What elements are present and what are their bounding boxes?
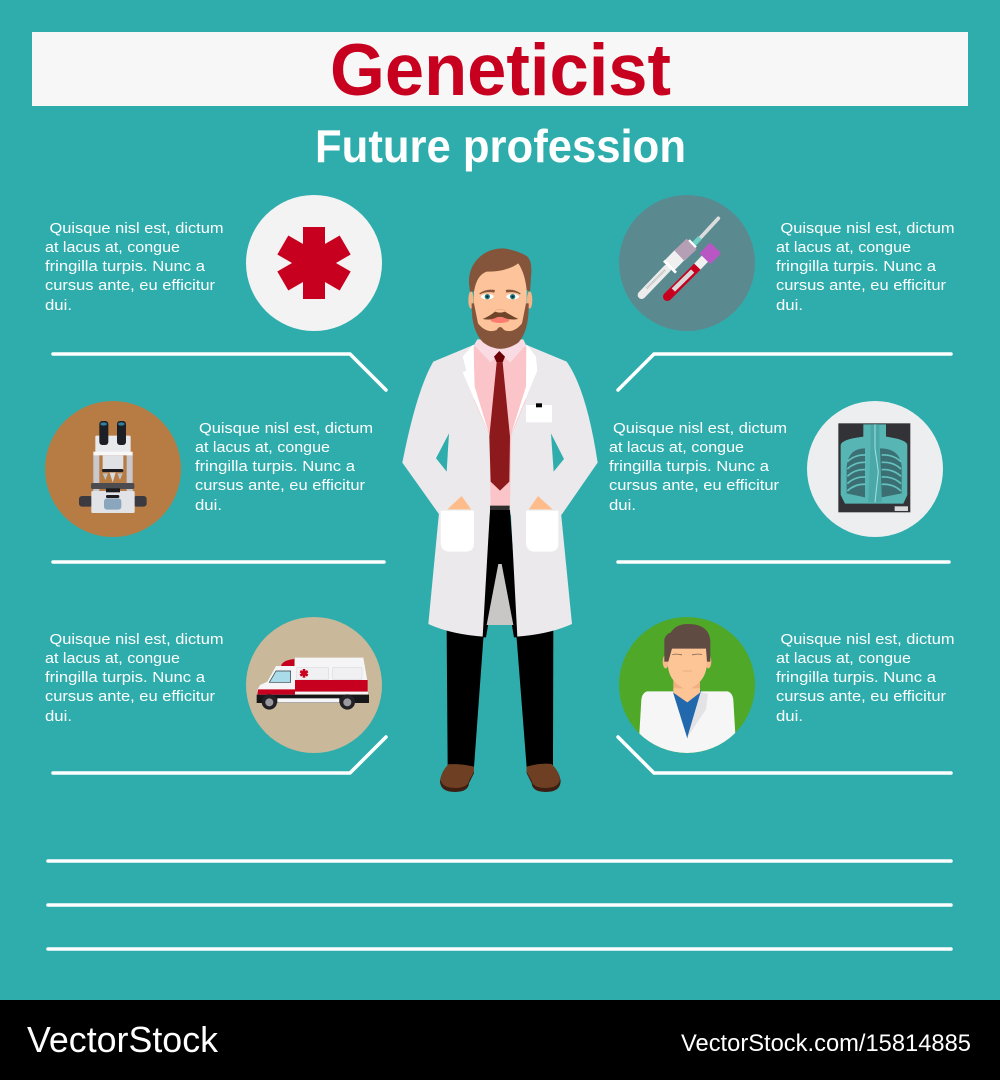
text block: top left xyxy=(45,220,224,314)
text block: bottom left xyxy=(45,631,224,725)
text block: middle right: at lacus at, congue xyxy=(609,439,744,456)
text block: middle left xyxy=(195,420,373,514)
text block: top right: fringilla turpis. Nunc a xyxy=(776,258,937,275)
icon: syringe and blood tube xyxy=(619,195,755,331)
text block: bottom left: Quisque nisl est, dictum xyxy=(50,631,224,648)
footer bar: VectorStock xyxy=(27,1019,219,1060)
text block: middle left: at lacus at, congue xyxy=(195,439,330,456)
text block: bottom left: at lacus at, congue xyxy=(45,650,180,667)
text block: top left: fringilla turpis. Nunc a xyxy=(45,258,206,275)
text block: top left: Quisque nisl est, dictum xyxy=(50,220,224,237)
text block: bottom left: dui. xyxy=(45,708,72,725)
footer bar: VectorStock.com/15814885 xyxy=(681,1030,971,1057)
text block: middle right: cursus ante, eu efficitur xyxy=(609,477,779,494)
text block: top right: dui. xyxy=(776,297,803,314)
head xyxy=(468,248,532,349)
text block: bottom right xyxy=(776,631,954,725)
figure lower body xyxy=(428,509,572,792)
text block: bottom right: dui. xyxy=(776,708,803,725)
text block: middle right: dui. xyxy=(609,497,636,514)
text block: bottom right: fringilla turpis. Nunc a xyxy=(776,669,937,686)
text block: middle right: Quisque nisl est, dictum xyxy=(613,420,787,437)
figure: geneticist in white coat xyxy=(402,248,598,792)
text block: middle left: cursus ante, eu efficitur xyxy=(195,477,365,494)
figure upper body xyxy=(402,248,598,515)
text block: top right xyxy=(776,220,954,314)
text block: top left: at lacus at, congue xyxy=(45,239,180,256)
text block: middle left: Quisque nisl est, dictum xyxy=(199,420,373,437)
icon: doctor avatar xyxy=(619,617,755,757)
text block: middle right xyxy=(609,420,787,514)
text block: top left: dui. xyxy=(45,297,72,314)
icon: microscope xyxy=(45,401,181,537)
footer bar xyxy=(0,1000,1000,1080)
text block: top right: at lacus at, congue xyxy=(776,239,911,256)
text block: bottom right: Quisque nisl est, dictum xyxy=(780,631,954,648)
text block: bottom left: fringilla turpis. Nunc a xyxy=(45,669,206,686)
icon: chest x-ray xyxy=(807,401,943,537)
text block: bottom right: cursus ante, eu efficitur xyxy=(776,688,946,705)
icon: medical asterisk xyxy=(246,195,382,331)
text block: bottom left: cursus ante, eu efficitur xyxy=(45,688,215,705)
text block: middle right: fringilla turpis. Nunc a xyxy=(609,458,770,475)
text block: top left: cursus ante, eu efficitur xyxy=(45,277,215,294)
text block: top right: cursus ante, eu efficitur xyxy=(776,277,946,294)
title banner xyxy=(32,30,968,111)
text block: bottom right: at lacus at, congue xyxy=(776,650,911,667)
title banner: Geneticist xyxy=(330,30,671,111)
text block: top right: Quisque nisl est, dictum xyxy=(780,220,954,237)
subtitle: Future profession xyxy=(315,120,686,172)
icon: ambulance xyxy=(246,617,382,753)
text block: middle left: fringilla turpis. Nunc a xyxy=(195,458,356,475)
text block: middle left: dui. xyxy=(195,497,222,514)
